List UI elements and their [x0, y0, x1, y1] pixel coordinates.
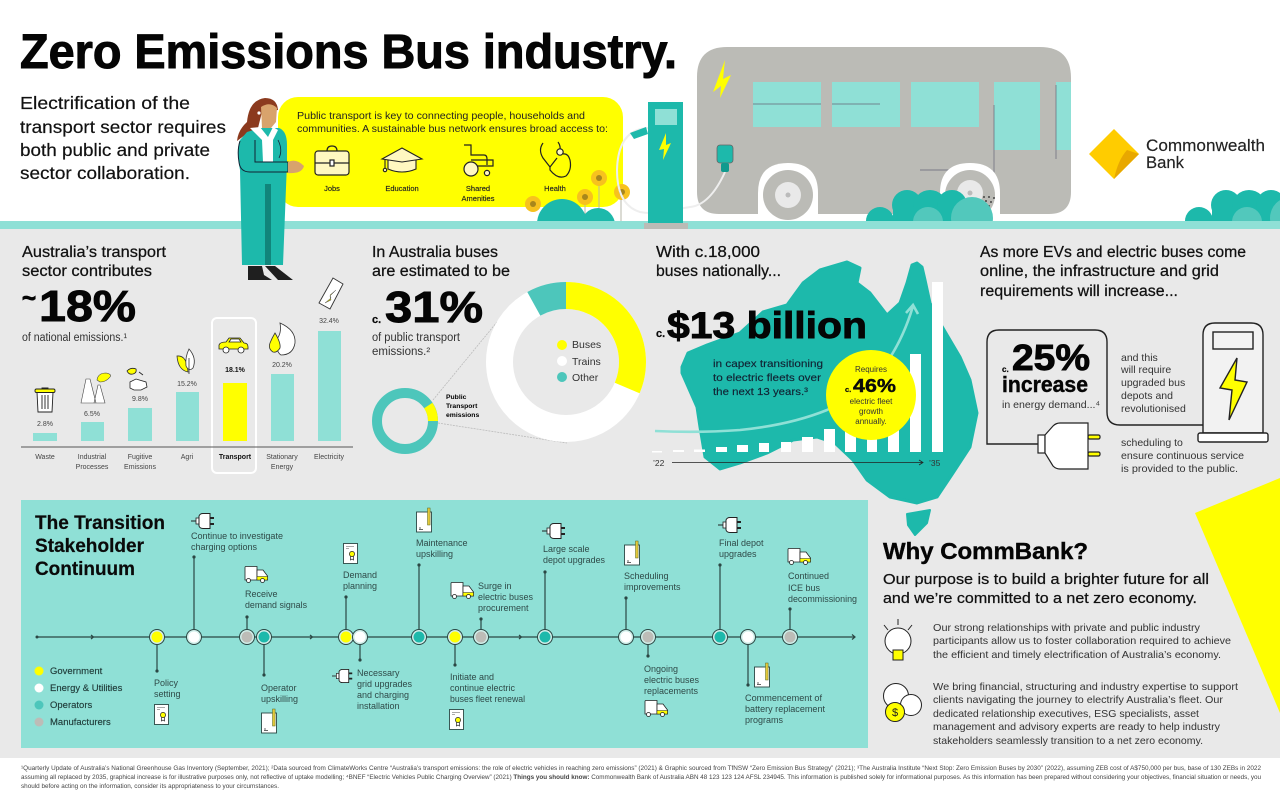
intro text: transport sector requires: [20, 117, 226, 137]
stat caption: of national emissions.¹: [22, 332, 127, 344]
heading: As more EVs and electric buses come: [980, 244, 1246, 261]
timeline labels: battery replacement: [745, 704, 825, 714]
timeline labels: upgrades: [719, 549, 757, 559]
timeline labels: Receive: [245, 589, 278, 599]
timeline labels: continue electric: [450, 683, 516, 693]
heading: Australia’s transport: [22, 244, 167, 261]
icon: flame: [269, 323, 295, 355]
bus windows: [753, 82, 1071, 150]
access text: communities. A sustainable bus network ensures broad access to:: [297, 123, 608, 135]
lightning bolt on bus: [713, 60, 731, 98]
timeline labels: demand signals: [245, 600, 307, 610]
stat caption: of public transport: [372, 332, 461, 344]
timeline labels: Final depot: [719, 538, 764, 548]
intro text: Electrification of the: [20, 93, 190, 113]
illustration: bus: [697, 47, 1071, 220]
panel: why CommBank: [883, 538, 1238, 747]
timeline labels: and charging: [357, 690, 409, 700]
bar chart: Transport: [219, 454, 252, 461]
timeline icons: [154, 508, 810, 733]
bar chart: Energy: [271, 464, 294, 471]
big stat 31%: c.: [372, 314, 381, 326]
timeline labels: Demand: [343, 570, 377, 580]
bar chart: 32.4%: [319, 318, 339, 325]
timeline labels: Commencement of: [745, 693, 823, 703]
timeline labels: electric buses: [644, 675, 700, 685]
timeline labels: programs: [745, 715, 784, 725]
timeline labels: setting: [154, 689, 181, 699]
illustration: charging station: [617, 102, 733, 229]
big stat 31%: 31%: [385, 283, 483, 332]
big stat 25%: 25%: [1012, 337, 1090, 378]
bar chart: Stationary: [266, 454, 298, 461]
text: relationships: the efficient and timely electrification of Australia’s economy.: [933, 649, 1221, 661]
timeline labels: installation: [357, 701, 400, 711]
timeline labels: depot upgrades: [543, 555, 605, 565]
text: relationships: participants allow us to foster collaboration required to achieve: [933, 635, 1231, 647]
bus wheels: [758, 163, 1000, 220]
icon: car: [219, 338, 248, 353]
continuum heading: Continuum: [35, 559, 135, 580]
text: expertise: stakeholders seamlessly transition to a net zero economy.: [933, 735, 1203, 747]
text: depots: and this: [1121, 352, 1158, 364]
intro text: both public and private: [20, 140, 210, 160]
small donut label: Public: [446, 394, 467, 401]
timeline labels: Continue to investigate: [191, 531, 283, 541]
timeline labels: Scheduling: [624, 571, 669, 581]
heading: Why CommBank?: [883, 538, 1088, 564]
heading: sector contributes: [22, 263, 152, 280]
capex text: to electric fleets over: [713, 372, 822, 384]
stem end dots: [155, 555, 792, 687]
text: depots: revolutionised: [1121, 403, 1186, 415]
bus charging plug: [717, 145, 733, 172]
continuum heading: [35, 513, 165, 580]
map of Tasmania: [907, 510, 930, 535]
text: relationships: [933, 622, 1231, 661]
text: scheduling: ensure continuous service: [1121, 450, 1244, 462]
timeline labels: Operator: [261, 683, 297, 693]
label: health: Health: [544, 184, 566, 193]
coat: [238, 128, 287, 265]
face: [261, 104, 277, 128]
intro text: [20, 93, 226, 183]
timeline labels: Policy: [154, 678, 179, 688]
footnotes: [21, 765, 1262, 790]
bar chart: 9.8%: [132, 396, 148, 403]
connector outline: [987, 330, 1205, 444]
icon: bin: [35, 388, 55, 412]
timeline axis: [37, 634, 855, 640]
panel: national emissions: [21, 244, 353, 473]
capex text: the next 13 years.³: [713, 386, 809, 398]
icon: coins: $: [892, 707, 898, 719]
small donut label: Transport: [446, 403, 478, 410]
big stat 18%: 18%: [39, 282, 136, 331]
icon: coal rock: [127, 368, 147, 390]
label: shared amenities: Amenities: [462, 194, 495, 203]
timeline labels: Surge in: [478, 581, 512, 591]
bar chart: Industrial: [78, 454, 107, 461]
panel: public transport emissions: [372, 244, 632, 449]
panel: capex: [652, 244, 977, 535]
continuum heading: Stakeholder: [35, 536, 145, 557]
text: depots: upgraded bus: [1121, 377, 1185, 389]
bar chart: Electricity: [314, 454, 344, 461]
label: education: Education: [385, 184, 419, 193]
timeline labels: planning: [343, 581, 377, 591]
small donut label: [446, 394, 479, 419]
text: depots: [1120, 352, 1186, 415]
illustration: woman: [237, 98, 304, 280]
panel: public transport access: [278, 97, 623, 207]
callout 46%: [826, 350, 916, 440]
time axis: ’22: [653, 458, 665, 468]
icon: stethoscope: [540, 142, 570, 177]
logo: Commonwealth Bank: [1089, 129, 1265, 179]
text: expertise: clients navigating the journey to electrify Australia’s fleet. Our: [933, 694, 1224, 706]
panel: infrastructure: [980, 244, 1268, 475]
small donut: [377, 393, 433, 449]
icon: factory: [81, 373, 110, 403]
stat caption: emissions.²: [372, 346, 430, 358]
label: jobs: Jobs: [324, 184, 340, 193]
bar chart: 18.1%: [225, 367, 246, 374]
text: depots: will require: [1120, 364, 1171, 376]
large donut: [500, 296, 632, 428]
bar chart: 15.2%: [177, 381, 197, 388]
footnotes: should before acting on the information, consider its appropriateness to your circumstances.: [21, 783, 279, 790]
access text: [297, 110, 608, 135]
timeline labels: upskilling: [261, 694, 298, 704]
shoes: [248, 266, 293, 280]
callout 46%: c.: [845, 385, 851, 394]
timeline labels: ICE bus: [788, 583, 821, 593]
timeline labels: charging options: [191, 542, 258, 552]
big stat 18%: ~: [22, 285, 36, 312]
heading: buses nationally...: [656, 263, 781, 280]
timeline labels: [154, 531, 857, 725]
capex text: in capex transitioning: [713, 358, 823, 370]
heading: In Australia buses: [372, 244, 498, 261]
timeline labels: improvements: [624, 582, 681, 592]
text: expertise: management and advisory experts are ready to help industry: [933, 721, 1221, 733]
timeline labels: Ongoing: [644, 664, 678, 674]
text: scheduling: [1121, 437, 1244, 475]
timeline labels: electric buses: [478, 592, 534, 602]
illustration: shrub far right: [1185, 190, 1280, 221]
intro text: sector collaboration.: [20, 163, 190, 183]
connector lines: [433, 322, 567, 443]
icon: large charger: [1198, 323, 1268, 442]
bar chart: 20.2%: [272, 362, 292, 369]
logo: Commonwealth Bank: Commonwealth: [1146, 136, 1265, 155]
big stat 25%: increase: [1002, 372, 1088, 397]
big stat 25%: in energy demand...⁴: [1002, 399, 1100, 411]
callout 46%: 46%: [853, 376, 896, 396]
purpose statement: Our purpose is to build a brighter future for all: [883, 572, 1209, 588]
heading: are estimated to be: [372, 263, 510, 280]
hair: [237, 98, 278, 141]
text: expertise: We bring financial, structuring and industry expertise to support: [933, 681, 1238, 693]
timeline labels: procurement: [478, 603, 529, 613]
bar chart: Processes: [76, 464, 109, 471]
label: shared amenities: Shared: [466, 184, 490, 193]
heading: With c.18,000: [656, 244, 760, 261]
donut legend: Buses: [572, 339, 601, 351]
stakeholder legend: [34, 666, 123, 728]
big stat 25%: [1002, 337, 1100, 411]
timeline nodes: [150, 630, 798, 644]
bar chart: [21, 318, 353, 471]
transport highlight box: [212, 318, 256, 473]
donut legend: Other: [572, 372, 599, 384]
heading: [980, 244, 1246, 300]
growth arrow: [655, 305, 918, 432]
footnotes: assuming all replaced by 2035, graphical increase is for illustrative purposes only, not reflective of uptake modelling; ⁴BNEF “Electric Vehicles Public Charging Overview” (2021) Things you should know: Commonwealth Bank of Australia ABN 48 123 123 124 AFSL 234945. This information is published solely for informational purposes. As this information has been prepared without considering your objectives, financial situation or needs, you: [21, 774, 1261, 781]
timeline stems: [157, 557, 790, 685]
text: scheduling: scheduling to: [1121, 437, 1183, 449]
small donut label: emissions: [446, 412, 479, 419]
timeline labels: upskilling: [416, 549, 453, 559]
timeline labels: buses fleet renewal: [450, 694, 525, 704]
callout 46%: growth: [859, 407, 883, 416]
icon: graduation cap: [382, 148, 422, 172]
bar chart: Fugitive: [128, 454, 152, 461]
callout 46%: Requires: [855, 365, 887, 374]
big stat 25%: c.: [1002, 365, 1009, 374]
icon: coins: [884, 684, 922, 722]
collar: [250, 127, 278, 162]
purpose statement: and we’re committed to a net zero economy.: [883, 591, 1197, 607]
icon: wheelchair: [464, 145, 493, 176]
logo: Commonwealth Bank: Bank: [1146, 153, 1184, 172]
timeline labels: Large scale: [543, 544, 590, 554]
timeline labels: replacements: [644, 686, 699, 696]
stakeholder legend: Energy & Utilities: [50, 683, 123, 694]
heading: [656, 244, 781, 280]
stakeholder legend: Manufacturers: [50, 717, 111, 728]
icon: large plug: [1038, 423, 1100, 469]
heading: [22, 244, 167, 280]
bar chart: Waste: [35, 454, 55, 461]
big stat 13 billion: c.: [656, 328, 665, 340]
bar chart: Emissions: [124, 464, 156, 471]
access text: Public transport is key to connecting people, households and: [297, 110, 585, 122]
sleeve: [238, 140, 288, 172]
donut legend: [557, 339, 601, 384]
text: expertise: dedicated relationship executives, ESG specialists, asset: [933, 708, 1199, 720]
text: expertise: [933, 681, 1238, 747]
purpose statement: [883, 572, 1209, 607]
bar chart: Agri: [181, 454, 194, 461]
fleet growth bars: [652, 282, 943, 452]
timeline labels: Initiate and: [450, 672, 494, 682]
time axis: [653, 458, 941, 468]
donut legend: Trains: [572, 356, 601, 368]
illustration: shrub in front of bus: [866, 190, 993, 221]
timeline labels: Necessary: [357, 668, 400, 678]
icon: leaf: [177, 349, 194, 374]
heading: requirements will increase...: [980, 283, 1178, 300]
continuum heading: The Transition: [35, 513, 165, 534]
title: Zero Emissions Bus industry.: [20, 26, 677, 79]
panel: transition stakeholder continuum: [21, 500, 868, 748]
timeline labels: decommissioning: [788, 594, 857, 604]
icon: flowers and shrubs: [525, 170, 630, 221]
text: depots: depots and: [1121, 390, 1173, 402]
callout 46%: electric fleet: [850, 397, 893, 406]
icon: light bulb: [884, 619, 912, 660]
time axis: ’35: [929, 458, 941, 468]
timeline labels: grid upgrades: [357, 679, 413, 689]
big stat 13 billion: $13 billion: [667, 305, 867, 346]
label: shared amenities: [462, 184, 495, 203]
ground strip: [0, 221, 1280, 229]
bar chart: 6.5%: [84, 411, 100, 418]
text: scheduling: is provided to the public.: [1121, 463, 1238, 475]
grey content band: [0, 229, 1280, 758]
stakeholder legend: Operators: [50, 700, 92, 711]
hand: [288, 161, 304, 173]
icon: briefcase: [315, 146, 349, 175]
callout 46%: annually.: [855, 417, 887, 426]
stakeholder legend: Government: [50, 666, 103, 677]
capex text: [713, 358, 823, 398]
icon: battery: [319, 278, 343, 309]
heading: [372, 244, 510, 280]
decorative yellow corner: [1195, 478, 1280, 713]
stat caption: [372, 332, 461, 358]
map of Australia: [682, 262, 977, 503]
footnotes: ¹Quarterly Update of Australia’s National Greenhouse Gas Inventory (September, 2021); ²Data sourced from ClimateWorks Centre “Australia’s transport emissions: the role of electric vehicles in reaching zero emissions” (2021) & Graphic sourced from TfNSW “Zero Emission Bus Strategy” (2021); ³The Australia Institute “Next Stop: Zero Emission Buses by 2030” (2022), assuming ZEB cost of A$750,000 per bus, base of 130 ZEBs in 2022: [21, 765, 1262, 772]
text: relationships: Our strong relationships with private and public industry: [933, 622, 1201, 634]
bar chart: 2.8%: [37, 421, 53, 428]
heading: online, the infrastructure and grid: [980, 263, 1219, 280]
timeline labels: Continued: [788, 571, 829, 581]
timeline labels: Maintenance: [416, 538, 468, 548]
